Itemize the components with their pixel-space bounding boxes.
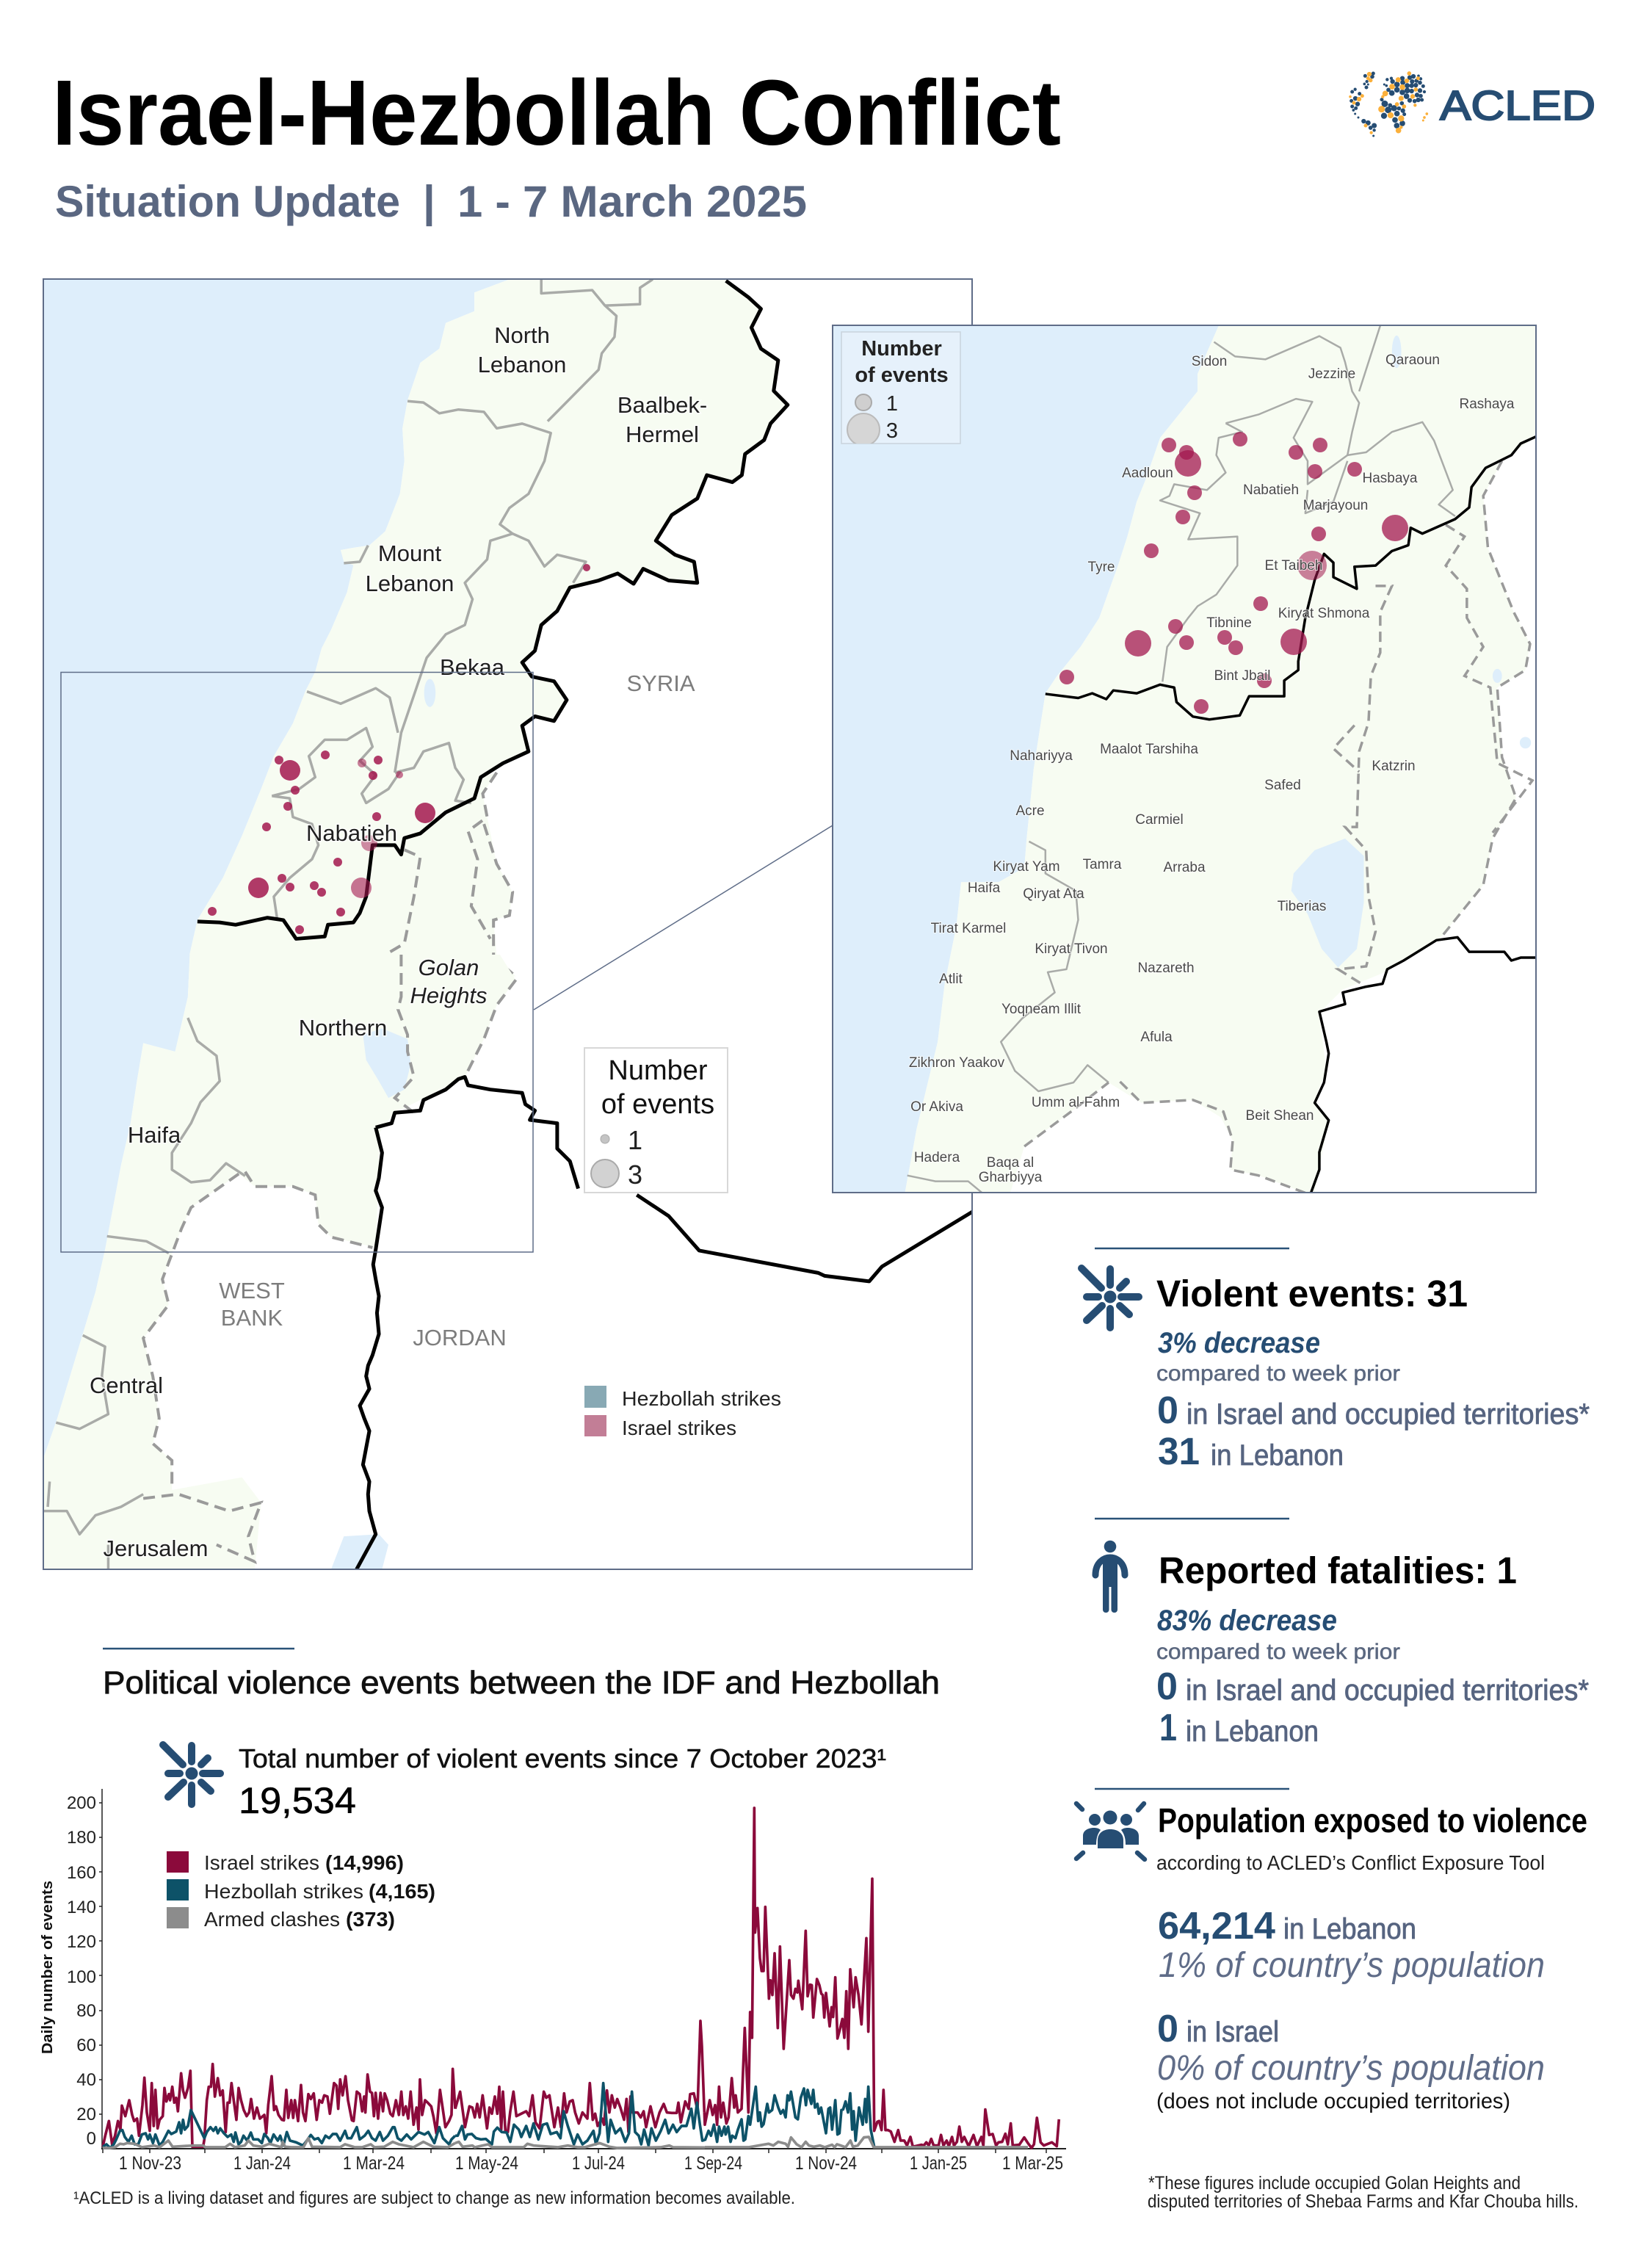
- inset place names: Qiryat Ata: [1023, 886, 1084, 902]
- series: armed clashes: [103, 2137, 1028, 2148]
- region and country labels: Lebanon: [366, 571, 454, 596]
- inset place names: Umm al-Fahm: [1032, 1095, 1120, 1110]
- title: Israel-Hezbollah Conflict: [52, 61, 1061, 164]
- inset place names: Nahariyya: [1010, 748, 1073, 764]
- footnote: figures scope: [1148, 2173, 1579, 2212]
- events in Israel: [1157, 1389, 1590, 1432]
- subtitle: [55, 177, 807, 227]
- icon: violent events burst: [1082, 1268, 1139, 1328]
- heading: Population exposed to violence: [1158, 1801, 1587, 1840]
- line chart legend: Armed clashes: [204, 1908, 340, 1931]
- y axis labels: 120: [67, 1932, 96, 1952]
- line chart legend: (14,996): [325, 1851, 404, 1874]
- fatalities in Israel: [1156, 1666, 1589, 1708]
- legend: number of events (inset): [841, 332, 960, 446]
- legend: number of events (main map): 1: [628, 1125, 642, 1155]
- subtitle: 1 - 7 March 2025: [457, 177, 807, 226]
- legend: strike colours: [584, 1386, 781, 1439]
- region and country labels: Central: [90, 1372, 163, 1398]
- inset place names: Hadera: [914, 1150, 960, 1165]
- footnote: living dataset: ¹ACLED is a living dataset and figures are subject to change as new information becomes available.: [73, 2188, 795, 2208]
- event bubbles on inset: [1059, 432, 1408, 714]
- line chart legend: Israel strikes: [204, 1851, 319, 1874]
- upper map area: [38, 279, 788, 999]
- icon: dotted globe: [1350, 72, 1428, 137]
- exposed in Israel: in Israel: [1187, 2016, 1279, 2048]
- section rule: [1095, 1248, 1289, 1249]
- panel: population exposed: [1076, 1789, 1587, 2113]
- y axis labels: 20: [76, 2105, 96, 2124]
- source note: according to ACLED’s Conflict Exposure Tool: [1156, 1851, 1545, 1874]
- series: Hezbollah strikes: [103, 2083, 874, 2148]
- occupied territories note: (does not include occupied territories): [1156, 2089, 1510, 2113]
- legend: number of events (main map): [584, 1048, 728, 1193]
- x axis labels: 1 Mar-25: [1002, 2153, 1063, 2174]
- inset place names: Tiberias: [1278, 899, 1326, 914]
- section rule: [1095, 1518, 1289, 1519]
- region and country labels: Bekaa: [440, 654, 505, 680]
- region and country labels: Baalbek-: [617, 392, 707, 418]
- inset place names: Atlit: [939, 972, 963, 987]
- x axis labels: 1 Jul-24: [572, 2153, 625, 2174]
- region and country labels: Heights: [410, 983, 488, 1008]
- y axis labels: 80: [76, 2001, 96, 2021]
- inset geography: [827, 325, 1540, 1193]
- events in Israel: 0: [1157, 1389, 1178, 1432]
- inset place names: Tibnine: [1206, 615, 1252, 631]
- x axis labels: 1 Nov-23: [119, 2153, 181, 2174]
- region and country labels: Mount: [378, 540, 441, 566]
- legend: number of events (main map): of events: [601, 1089, 714, 1120]
- inset place names: Or Akiva: [910, 1099, 963, 1115]
- region and country labels: North: [494, 322, 550, 348]
- legend: strike colours: Hezbollah strikes: [622, 1387, 781, 1410]
- y axis labels: 160: [67, 1863, 96, 1883]
- inset place names: Safed: [1264, 778, 1301, 793]
- map base: [43, 279, 972, 1569]
- exposed in Lebanon: 64,214: [1158, 1905, 1275, 1947]
- inset base: [833, 325, 1536, 1193]
- inset place names: Beit Shean: [1246, 1108, 1314, 1124]
- y axis title: Daily number of events: [40, 1881, 56, 2054]
- region and country labels: Haifa: [128, 1122, 181, 1148]
- region and country labels: Nabatieh: [306, 820, 397, 846]
- inset place names: Nabatieh: [1243, 482, 1299, 498]
- region and country labels: Lebanon: [478, 352, 566, 377]
- event bubbles on main map: [208, 564, 590, 934]
- icon: group of people: [1076, 1804, 1145, 1859]
- inset place names: Nazareth: [1137, 961, 1195, 976]
- y axis labels: 100: [67, 1967, 96, 1987]
- y axis labels: 0: [87, 2129, 96, 2149]
- legend: number of events (main map): Number: [608, 1055, 708, 1086]
- map geography: [38, 279, 972, 1569]
- region and country labels: Jerusalem: [103, 1536, 209, 1561]
- fatalities in Lebanon: in Lebanon: [1186, 1715, 1319, 1748]
- legend: strike colours: Israel strikes: [622, 1417, 736, 1439]
- region and country labels: JORDAN: [413, 1325, 507, 1350]
- legend: number of events (inset): of events: [855, 364, 949, 387]
- inset place names: Hasbaya: [1363, 471, 1418, 486]
- inset place names: Kiryat Shmona: [1278, 606, 1370, 621]
- inset place names: Katzrin: [1372, 759, 1416, 774]
- region and country labels: Hermel: [626, 422, 699, 447]
- region and country labels: SYRIA: [626, 670, 695, 696]
- heading: Reported fatalities: 1: [1159, 1549, 1517, 1591]
- inset place names: Acre: [1015, 803, 1045, 819]
- panel: reported fatalities: [1095, 1519, 1589, 1749]
- chart heading: Political violence events between the IDF and Hezbollah: [103, 1665, 940, 1701]
- inset place names: Bint Jbail: [1214, 668, 1271, 684]
- legend: number of events (inset): 3: [886, 419, 898, 443]
- fatalities in Lebanon: 1: [1159, 1707, 1177, 1749]
- icon: person: [1095, 1541, 1125, 1613]
- line chart legend: (373): [346, 1908, 395, 1931]
- total events label: Total number of violent events since 7 October 2023¹: [239, 1743, 886, 1773]
- fatalities in Israel: in Israel and occupied territories*: [1186, 1674, 1589, 1707]
- inset extent rectangle: [61, 673, 533, 1252]
- inset place names: Sidon: [1192, 354, 1227, 369]
- region and country labels: BANK: [221, 1305, 283, 1331]
- inset connector line: [534, 825, 833, 1010]
- line chart legend: (4,165): [369, 1880, 435, 1903]
- region and country labels: Golan: [419, 955, 479, 980]
- section rule: [103, 1648, 294, 1649]
- region and country labels: WEST: [219, 1278, 285, 1303]
- map frame: [43, 279, 972, 1569]
- total events value: 19,534: [239, 1780, 356, 1821]
- events in Israel: in Israel and occupied territories*: [1187, 1398, 1590, 1431]
- subtitle: Situation Update: [55, 177, 400, 226]
- inset place names: Jezzine: [1308, 366, 1355, 382]
- inset place names: Rashaya: [1460, 397, 1515, 412]
- inset place names: Afula: [1140, 1030, 1173, 1045]
- x axis labels: 1 Jan-24: [233, 2153, 291, 2174]
- events in Lebanon: in Lebanon: [1211, 1439, 1344, 1472]
- y axis labels: 60: [76, 2036, 96, 2055]
- chart axes: [99, 1789, 1066, 2153]
- legend: number of events (main map): 3: [628, 1160, 642, 1190]
- change vs prior week: 83% decrease: [1157, 1605, 1337, 1637]
- comparison note: compared to week prior: [1156, 1640, 1400, 1664]
- inset place names: Tyre: [1088, 560, 1115, 575]
- x axis labels: 1 Sep-24: [684, 2153, 742, 2174]
- panel: violent events: [1082, 1248, 1590, 1473]
- subtitle: |: [423, 177, 435, 227]
- y axis labels: [67, 1793, 96, 2149]
- lower map area: [38, 955, 972, 1569]
- inset place names: Tamra: [1083, 857, 1122, 872]
- panel: main map of Lebanon and northern Israel: [38, 279, 972, 1569]
- x axis labels: [119, 2153, 1063, 2174]
- panel: political violence chart: [40, 1649, 1066, 2208]
- exposed in Lebanon: [1158, 1905, 1416, 1947]
- y axis labels: 140: [67, 1898, 96, 1917]
- section rule: [1095, 1788, 1289, 1790]
- events in Lebanon: 31: [1158, 1431, 1200, 1473]
- y axis labels: 200: [67, 1793, 96, 1813]
- heading: Violent events: 31: [1156, 1273, 1468, 1314]
- inset place names: Zikhron Yaakov: [909, 1055, 1005, 1071]
- region and country labels: Northern: [299, 1015, 387, 1041]
- fatalities in Israel: 0: [1156, 1666, 1178, 1708]
- inset place names: Tirat Karmel: [931, 921, 1006, 936]
- Israel population share: 0% of country’s population: [1157, 2049, 1545, 2088]
- panel: inset map of southern Lebanon and northern Israel: [827, 325, 1540, 1193]
- x axis labels: 1 Nov-24: [795, 2153, 857, 2174]
- x axis labels: 1 Jan-25: [910, 2153, 967, 2174]
- events in Lebanon: [1158, 1431, 1344, 1473]
- inset place names: Haifa: [968, 880, 1001, 896]
- comparison note: compared to week prior: [1156, 1361, 1400, 1386]
- line chart legend: [167, 1851, 435, 1931]
- Lebanon population share: 1% of country’s population: [1159, 1946, 1545, 1985]
- y axis labels: 40: [76, 2070, 96, 2090]
- inset place names: [909, 352, 1515, 1185]
- y axis labels: 180: [67, 1828, 96, 1848]
- legend: number of events (inset): 1: [886, 392, 898, 416]
- inset frame: [833, 325, 1536, 1193]
- inset place names: Et Taibeh: [1265, 558, 1322, 574]
- inset place names: Kiryat Yam: [993, 859, 1060, 875]
- footnote: figures scope: *These figures include occupied Golan Heights and: [1148, 2173, 1521, 2194]
- change vs prior week: 3% decrease: [1158, 1327, 1320, 1359]
- inset place names: Arraba: [1163, 860, 1206, 875]
- inset place names: Baqa al: [987, 1155, 1034, 1171]
- legend: number of events (inset): Number: [861, 337, 942, 361]
- inset place names: Maalot Tarshiha: [1100, 742, 1198, 757]
- region and country labels: [90, 322, 707, 1561]
- inset place names: Gharbiyya: [979, 1170, 1043, 1185]
- exposed in Lebanon: in Lebanon: [1283, 1913, 1416, 1945]
- icon: violent events burst: [163, 1745, 220, 1804]
- footnote: figures scope: disputed territories of Shebaa Farms and Kfar Chouba hills.: [1148, 2191, 1579, 2212]
- ACLED logo: [1350, 72, 1595, 137]
- exposed in Israel: [1157, 2008, 1279, 2050]
- line chart legend: Hezbollah strikes: [204, 1880, 363, 1903]
- inset place names: Carmiel: [1135, 812, 1184, 828]
- series: Israel strikes: [103, 1808, 1059, 2148]
- inset place names: Aadloun: [1122, 466, 1173, 481]
- fatalities in Lebanon: [1159, 1707, 1319, 1749]
- inset place names: Qaraoun: [1385, 352, 1440, 368]
- exposed in Israel: 0: [1157, 2008, 1178, 2050]
- x axis labels: 1 May-24: [455, 2153, 518, 2174]
- x axis labels: 1 Mar-24: [343, 2153, 405, 2174]
- inset place names: Kiryat Tivon: [1035, 941, 1108, 957]
- inset place names: Yoqneam Illit: [1001, 1002, 1082, 1017]
- inset place names: Marjayoun: [1303, 498, 1368, 513]
- logo wordmark: ACLED: [1440, 82, 1595, 129]
